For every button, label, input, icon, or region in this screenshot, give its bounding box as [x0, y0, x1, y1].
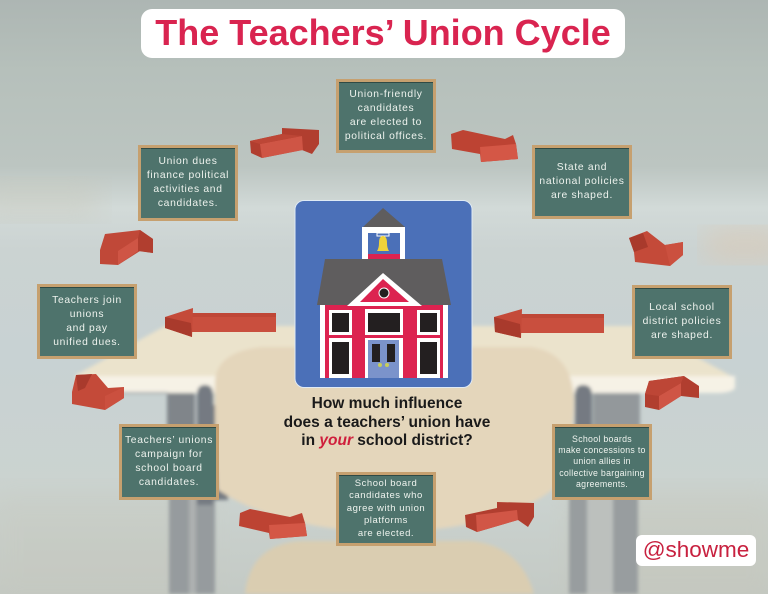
board: school boards make concessions: collective bargaining — [559, 468, 645, 478]
arrow: school boards to elected candidates — [465, 502, 534, 532]
board: state and national policies: State and — [557, 162, 607, 173]
arrow: candidates to policies — [451, 130, 518, 162]
board: school board candidates elected: agree with union — [347, 503, 425, 514]
board: union dues finance: finance political — [147, 170, 229, 181]
board: teachers join unions: unified dues. — [53, 336, 121, 348]
text block: central question — [284, 395, 490, 449]
board: school boards make concessions — [552, 424, 652, 500]
board: union dues finance: candidates. — [158, 198, 218, 209]
badge: @showme: @showme — [643, 537, 749, 562]
board: school board candidates elected: are elected. — [358, 528, 414, 539]
arrow: campaign to joining — [72, 374, 124, 410]
board: state and national policies — [532, 145, 632, 219]
board: union-friendly candidates: Union-friendly — [349, 89, 423, 100]
board: union dues finance: Union dues — [158, 156, 218, 167]
board: state and national policies: are shaped. — [551, 190, 613, 201]
board: local school district policies: Local school — [649, 302, 715, 313]
arrow: joining to dues — [100, 230, 153, 265]
board: union-friendly candidates: political offices. — [345, 131, 427, 142]
board: teachers join unions — [37, 284, 137, 359]
board: school board candidates elected: platforms — [364, 515, 408, 526]
arrow: elected candidates to campaign — [239, 509, 307, 539]
arrow: local policies to school boards — [645, 376, 699, 410]
text block: central question: in your school district? — [301, 432, 473, 449]
arrow: local policies toward center — [494, 309, 604, 338]
board: local school district policies: district policies — [643, 316, 721, 327]
board: unions campaign: school board — [135, 463, 203, 474]
board: unions campaign: candidates. — [139, 477, 199, 488]
text block: central question: does a teachers’ union have — [284, 414, 490, 430]
board: school board candidates elected: School board — [355, 478, 417, 489]
board: school boards make concessions: make concessions to — [558, 445, 646, 455]
title: The Teachers’ Union Cycle — [155, 12, 611, 53]
board: union dues finance: activities and — [153, 184, 223, 195]
text block: central question: How much influence — [312, 395, 462, 412]
board: union-friendly candidates: candidates — [358, 103, 414, 114]
board: local school district policies — [632, 285, 732, 359]
board: teachers join unions: and pay — [66, 322, 108, 334]
board: school boards make concessions: School boards — [572, 434, 632, 444]
arrow: dues to candidates — [250, 128, 319, 158]
board: local school district policies: are shaped. — [651, 330, 713, 341]
board: teachers join unions: unions — [70, 308, 104, 320]
board: unions campaign: Teachers’ unions — [125, 435, 213, 446]
arrow: state policies to local — [629, 231, 683, 266]
board: school board candidates elected — [336, 472, 436, 546]
board: school boards make concessions: agreements. — [576, 479, 628, 489]
board: school board candidates elected: candidates who — [349, 490, 423, 501]
board: unions campaign: campaign for — [135, 449, 203, 460]
board: union-friendly candidates: are elected to — [350, 117, 422, 128]
board: teachers join unions: Teachers join — [52, 294, 122, 306]
board: unions campaign — [119, 424, 219, 500]
board: union-friendly candidates — [336, 79, 436, 153]
arrow: center toward teachers join — [165, 308, 276, 337]
board: state and national policies: national policies — [539, 176, 625, 187]
board: school boards make concessions: union allies in — [573, 456, 631, 466]
board: union dues finance — [138, 145, 238, 221]
